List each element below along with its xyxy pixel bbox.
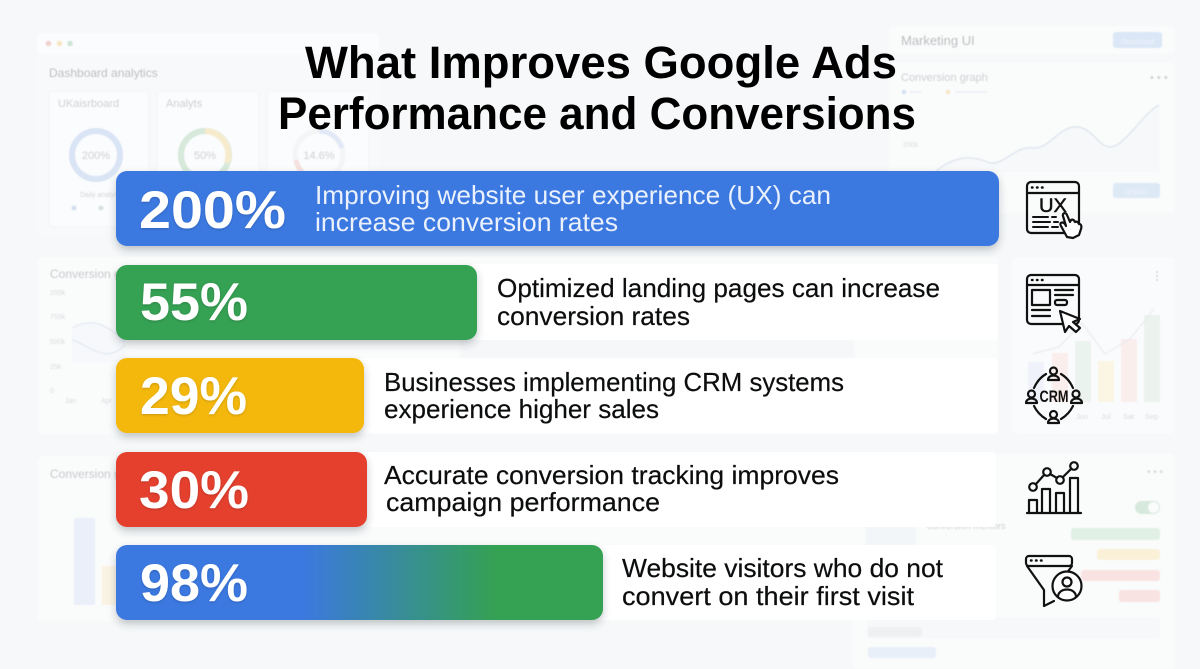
panel: blurred bar chart card: Jun (1076, 412, 1088, 421)
row 4: 30% stat bar: 30% (139, 461, 249, 520)
panel: blurred conversion graph: Jan (65, 398, 76, 405)
panel: blurred marketing UI: Unport (1125, 187, 1148, 196)
icon: UX window with hand: UX (1039, 196, 1067, 217)
row 4: 30% stat bar: Accurate conversion tracking improves (384, 460, 839, 490)
panel: blurred conversion graph: 755k (50, 314, 66, 321)
row 4: 30% stat bar: campaign performance (386, 487, 660, 517)
row 2: 55% stat bar: 55% (140, 273, 248, 332)
row 2: 55% stat bar: Optimized landing pages can increase (497, 273, 940, 303)
panel: blurred dashboard analytics: 200% (82, 150, 110, 162)
row 2: 55% stat bar (116, 265, 940, 340)
panel: blurred conversion graph: Conversion g (50, 267, 121, 281)
panel: blurred lower right card: conversion mentors (927, 521, 1006, 531)
panel: blurred lower left card (37, 456, 857, 621)
panel: blurred dashboard analytics: Analyts (166, 98, 203, 110)
panel: blurred conversion graph: 25k (50, 364, 62, 371)
title: Performance and Conversions (278, 88, 916, 139)
icon: growth chart (1027, 462, 1081, 513)
panel: blurred bar chart card: Jul (1101, 412, 1111, 421)
row 5: 98% gradient stat bar (116, 545, 944, 620)
panel: blurred bar chart card: Sat (1123, 412, 1135, 421)
panel: blurred conversion graph: Apr (101, 398, 113, 405)
row 3: 29% stat bar: Businesses implementing CRM systems (384, 367, 844, 397)
icon: landing page with cursor (1027, 275, 1080, 332)
icon: funnel with user (1026, 556, 1082, 606)
title (278, 37, 916, 139)
row 1: 200% stat bar: Improving website user experience (UX) can (315, 180, 831, 210)
panel: blurred lower right card (852, 453, 1175, 669)
panel: blurred dashboard analytics (37, 33, 379, 238)
panel: blurred lower left card: Conversion g (50, 467, 121, 481)
panel: blurred lower right card: • • • (1147, 467, 1164, 478)
row 2: 55% stat bar: conversion rates (497, 301, 690, 331)
panel: blurred marketing UI: Marketing UI (901, 33, 975, 48)
panel: blurred marketing UI: Download (1121, 37, 1154, 46)
panel: blurred marketing UI: Conversion graph (901, 72, 988, 84)
row 1: 200% stat bar: increase conversion rates (315, 207, 618, 237)
icon: CRM people ring (1026, 368, 1082, 423)
row 5: 98% gradient stat bar: Website visitors who do not (622, 553, 944, 583)
panel: blurred marketing UI (889, 26, 1175, 213)
panel: blurred conversion graph (37, 257, 998, 435)
panel: blurred bar chart card (1012, 257, 1175, 434)
panel: blurred conversion graph: 200k (50, 290, 66, 297)
row 3: 29% stat bar: experience higher sales (384, 394, 659, 424)
panel: blurred marketing UI: 200k (903, 142, 919, 149)
panel: blurred dashboard analytics: Daily analysed (80, 192, 126, 199)
panel: blurred bar chart card: Sep (1145, 412, 1158, 421)
icon: UX window with hand (1027, 182, 1081, 238)
row 5: 98% gradient stat bar: 98% (140, 554, 248, 613)
panel: blurred conversion graph: 0 (50, 388, 54, 395)
panel: blurred dashboard analytics: 50% (194, 150, 216, 162)
panel: blurred marketing UI: • • • (1150, 72, 1168, 84)
row 1: 200% stat bar: 200% (139, 181, 286, 240)
panel: blurred dashboard analytics: Dashboard analytics (49, 66, 158, 80)
panel: blurred dashboard analytics: UKaisrboard (58, 98, 119, 110)
row 4: 30% stat bar (116, 452, 839, 527)
icon: CRM people ring: CRM (1040, 387, 1068, 406)
title: What Improves Google Ads (305, 37, 897, 88)
row backing: white text panels (356, 264, 998, 620)
panel: blurred conversion graph: 500k (50, 339, 66, 346)
row 3: 29% stat bar: 29% (140, 367, 247, 426)
row 1: 200% stat bar (116, 171, 999, 246)
row 5: 98% gradient stat bar: convert on their first visit (622, 581, 915, 611)
row 3: 29% stat bar (116, 358, 844, 433)
panel: blurred dashboard analytics: 14.6% (303, 150, 335, 162)
